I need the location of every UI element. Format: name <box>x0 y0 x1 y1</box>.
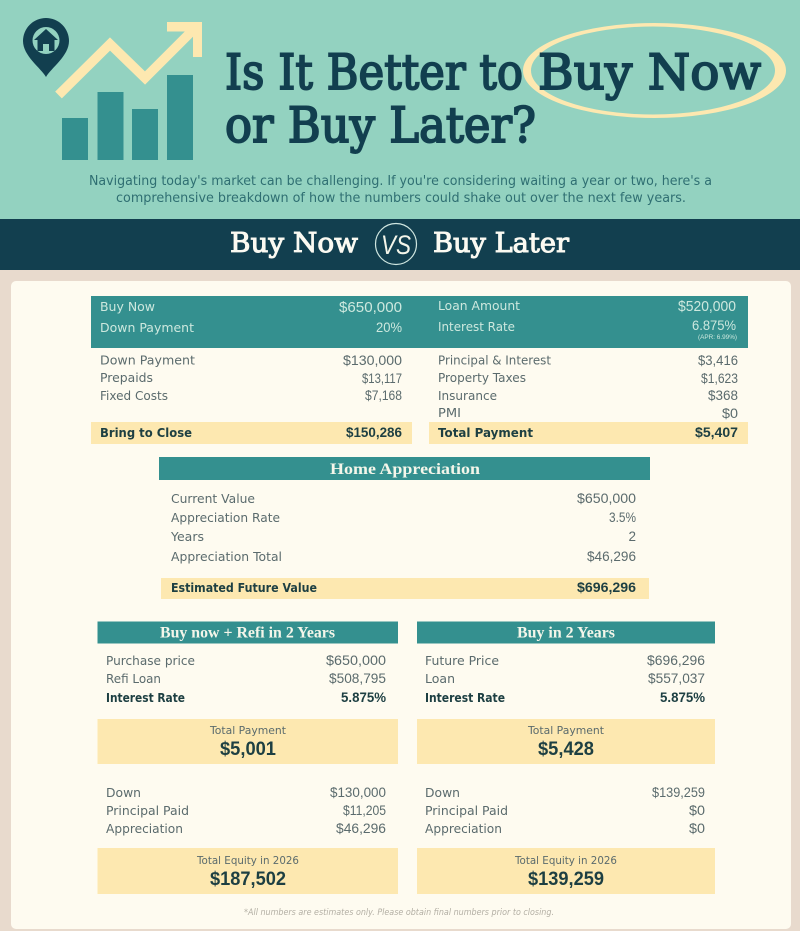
panel: buy in 2 years: $0 <box>689 821 705 836</box>
band: buy now vs buy later <box>0 219 800 270</box>
panel: home appreciation: Appreciation Total <box>171 549 282 564</box>
heading: buy now + refi: Buy now + Refi in 2 Years <box>160 624 335 642</box>
panel: monthly payment: $3,416 <box>698 353 738 368</box>
panel: closing costs <box>91 352 412 444</box>
highlight ellipse <box>523 23 786 118</box>
panel: loan summary: (APR: 6.99%) <box>698 335 737 341</box>
callout: total payment <box>417 719 715 764</box>
panel: buy in 2 years: $139,259 <box>652 785 705 800</box>
panel: monthly payment: $0 <box>722 406 738 421</box>
heading: buy in 2 years: Buy in 2 Years <box>517 624 615 642</box>
icon: bar chart <box>62 75 193 160</box>
panel: home appreciation: 3.5% <box>609 510 636 525</box>
panel: monthly payment: Insurance <box>438 388 497 403</box>
bring to close total: Bring to Close <box>100 425 192 440</box>
title: Buy Now <box>538 44 761 101</box>
title: Is It Better to <box>225 44 523 101</box>
panel: monthly payment: PMI <box>438 405 461 420</box>
total payment: Total Payment <box>438 425 533 440</box>
panel: buy now + refi in 2 years: $130,000 <box>330 785 386 800</box>
main card <box>11 281 791 929</box>
panel: buy in 2 years: $0 <box>689 803 705 818</box>
heading: home appreciation: Home Appreciation <box>330 461 480 478</box>
intro text <box>89 173 712 206</box>
band: buy now vs buy later: Buy Now <box>230 228 358 259</box>
intro text: Navigating today's market can be challenging. If you're considering waiting a year or two, here's a <box>89 173 712 189</box>
callout: total payment: Total Payment <box>527 724 605 737</box>
panel: closing costs: Down Payment <box>100 352 195 368</box>
panel: buy in 2 years: Interest Rate <box>425 690 505 705</box>
panel: closing costs: $13,117 <box>362 371 402 386</box>
panel: buy in 2 years: $696,296 <box>647 653 705 668</box>
callout: total payment: $5,428 <box>538 739 594 760</box>
panel: buy in 2 years: Appreciation <box>425 821 502 836</box>
panel: home appreciation: Appreciation Rate <box>171 510 280 525</box>
panel: buy now + refi in 2 years: Purchase price <box>106 653 195 668</box>
panel: closing costs: Prepaids <box>100 370 153 385</box>
panel: buy now + refi in 2 years: Refi Loan <box>106 671 161 686</box>
icon: VS badge <box>376 224 416 264</box>
title <box>225 44 761 154</box>
panel: loan summary: 20% <box>376 320 402 335</box>
panel: buy in 2 years: Loan <box>425 671 455 686</box>
heading: buy in 2 years <box>417 622 715 644</box>
intro text: comprehensive breakdown of how the numbers could shake out over the next few years. <box>116 190 686 206</box>
panel: loan summary: $520,000 <box>678 298 736 315</box>
callout: total equity <box>417 848 715 894</box>
callout: total equity: $187,502 <box>210 869 286 890</box>
panel: home appreciation: $46,296 <box>587 549 636 564</box>
panel: closing costs: $7,168 <box>365 388 402 403</box>
panel: loan summary: 6.875% <box>692 317 736 333</box>
total payment: $5,407 <box>695 425 738 440</box>
callout: total payment: $5,001 <box>220 739 276 760</box>
panel: home appreciation: 2 <box>628 529 636 544</box>
footnote: *All numbers are estimates only. Please obtain final numbers prior to closing. <box>244 908 554 918</box>
band: buy now vs buy later: Buy Later <box>433 228 569 259</box>
callout: total payment <box>98 719 398 764</box>
panel: buy now + refi in 2 years: $46,296 <box>336 821 386 836</box>
panel: buy in 2 years: Future Price <box>425 653 499 668</box>
bring to close total: $150,286 <box>346 425 402 440</box>
callout: total equity: Total Equity in 2026 <box>514 854 617 867</box>
icon: rising arrow <box>58 22 202 95</box>
callout: total equity <box>98 848 398 894</box>
panel: buy now + refi in 2 years: $508,795 <box>329 671 386 686</box>
panel: buy in 2 years <box>417 622 715 894</box>
panel: monthly payment: Property Taxes <box>438 370 526 385</box>
panel: closing costs: Fixed Costs <box>100 388 168 403</box>
estimated future value <box>161 578 649 599</box>
callout: total equity: $139,259 <box>528 869 604 890</box>
panel: buy now + refi in 2 years: Principal Paid <box>106 803 189 818</box>
icon: location pin with house <box>23 18 69 77</box>
panel: buy now + refi in 2 years: $650,000 <box>326 653 386 668</box>
panel: loan summary: $650,000 <box>339 299 402 316</box>
header panel <box>0 0 800 219</box>
panel: monthly payment: $1,623 <box>701 371 738 386</box>
panel: monthly payment: Principal & Interest <box>438 352 551 368</box>
panel: loan summary: Interest Rate <box>438 319 515 334</box>
panel: buy in 2 years: Principal Paid <box>425 803 508 818</box>
heading: buy now + refi <box>98 622 398 644</box>
panel: buy in 2 years: Down <box>425 785 460 800</box>
panel: loan summary: Down Payment <box>100 320 194 335</box>
icon: VS badge: VS <box>381 230 411 260</box>
panel: loan summary <box>91 296 748 348</box>
total payment <box>429 422 748 444</box>
bring to close total <box>91 422 412 444</box>
panel: buy now + refi in 2 years: Down <box>106 785 141 800</box>
panel: home appreciation: Years <box>170 529 204 544</box>
heading: home appreciation <box>159 457 650 480</box>
estimated future value: $696,296 <box>577 580 637 595</box>
title: or Buy Later? <box>225 97 536 154</box>
panel: home appreciation <box>159 457 650 599</box>
panel: buy now + refi in 2 years: $11,205 <box>343 803 386 818</box>
panel: buy in 2 years: 5.875% <box>660 690 705 705</box>
callout: total payment: Total Payment <box>209 724 287 737</box>
panel: buy now + refi in 2 years: 5.875% <box>341 690 386 705</box>
panel: buy in 2 years: $557,037 <box>648 671 705 686</box>
panel: closing costs: $130,000 <box>343 352 402 368</box>
panel: home appreciation: Current Value <box>171 491 255 506</box>
panel: monthly payment <box>429 352 748 444</box>
callout: total equity: Total Equity in 2026 <box>196 854 299 867</box>
estimated future value: Estimated Future Value <box>171 580 317 595</box>
panel: loan summary: Loan Amount <box>438 298 520 313</box>
panel: monthly payment: $368 <box>708 388 738 403</box>
panel: loan summary: Buy Now <box>100 299 155 314</box>
panel: buy now + refi in 2 years <box>98 622 398 894</box>
panel: home appreciation: $650,000 <box>577 491 636 506</box>
panel: buy now + refi in 2 years: Interest Rate <box>106 690 185 705</box>
panel: buy now + refi in 2 years: Appreciation <box>106 821 183 836</box>
